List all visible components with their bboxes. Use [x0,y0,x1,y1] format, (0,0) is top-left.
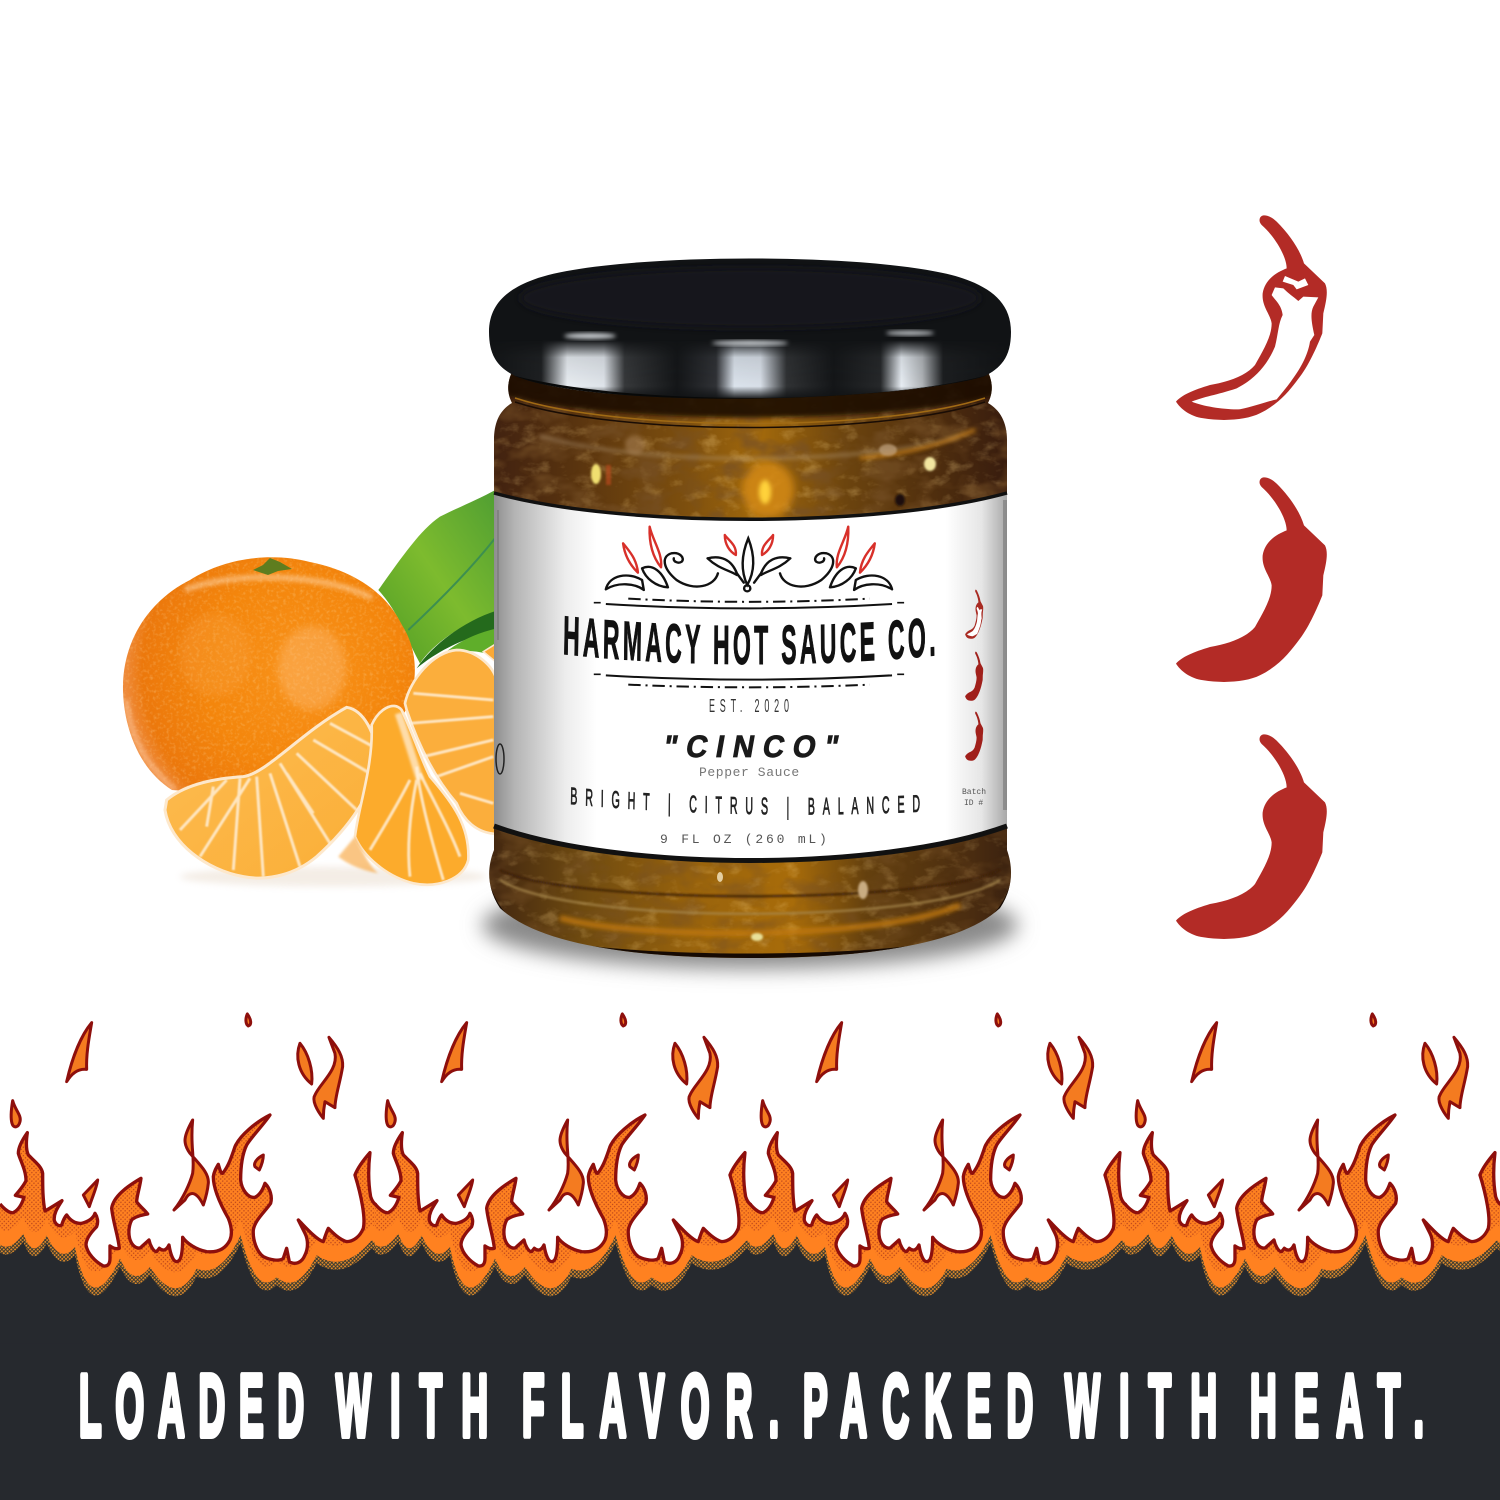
tagline [79,1358,1424,1456]
jar ground shadow [482,881,1018,969]
icon: pepper outline heat level 1 [1176,215,1327,420]
small side print [497,500,1007,810]
text: product type: Pepper Sauce [699,765,800,780]
dark footer band [0,1300,1500,1500]
text: batch id: ID # [964,799,983,808]
citrus fruit group [118,489,497,887]
icon: tangerine segment large [165,707,377,878]
icon: label badge [496,744,504,774]
base shading [490,885,1010,965]
flames border [0,1014,1500,1343]
sauce highlights [742,462,794,518]
jar [489,258,1012,958]
icon: pepper filled heat level 2 [1176,477,1327,682]
tagline: WITH [1065,1358,1217,1456]
soft shadow under fruit [180,867,487,887]
text: batch id: Batch [962,788,986,797]
panel: jar glass and sauce [485,370,1015,965]
text: brand name: HARMACY HOT SAUCE CO. [564,616,934,665]
text: flavor descriptors: BRIGHT | CITRUS | BALANCED [570,787,920,820]
text: volume: 9 FL OZ (260 mL) [660,832,830,847]
icon: tangerine segment middle [355,706,468,885]
panel: label [493,491,1008,863]
logo flourish [594,527,904,687]
icon: green leaf [378,489,497,668]
tagline: HEAT. [1250,1358,1424,1456]
neck shadow [505,372,995,418]
tagline: PACKED [803,1358,1033,1456]
icon: pepper filled heat level 3 [1176,734,1327,939]
icon: stem [253,558,292,575]
tagline: FLAVOR. [522,1358,779,1456]
text: brand name [564,616,934,665]
tagline: WITH [336,1358,488,1456]
orange reflections under fruit [338,837,378,873]
icon: whole tangerine [122,557,415,790]
text: established date: EST. 2020 [709,697,789,717]
text: variety name: "CINCO" [661,730,842,764]
tagline: LOADED [79,1358,304,1456]
panel: lid [489,258,1011,399]
icon: tangerine segment right [405,643,497,834]
icon: label heat peppers [965,590,983,761]
